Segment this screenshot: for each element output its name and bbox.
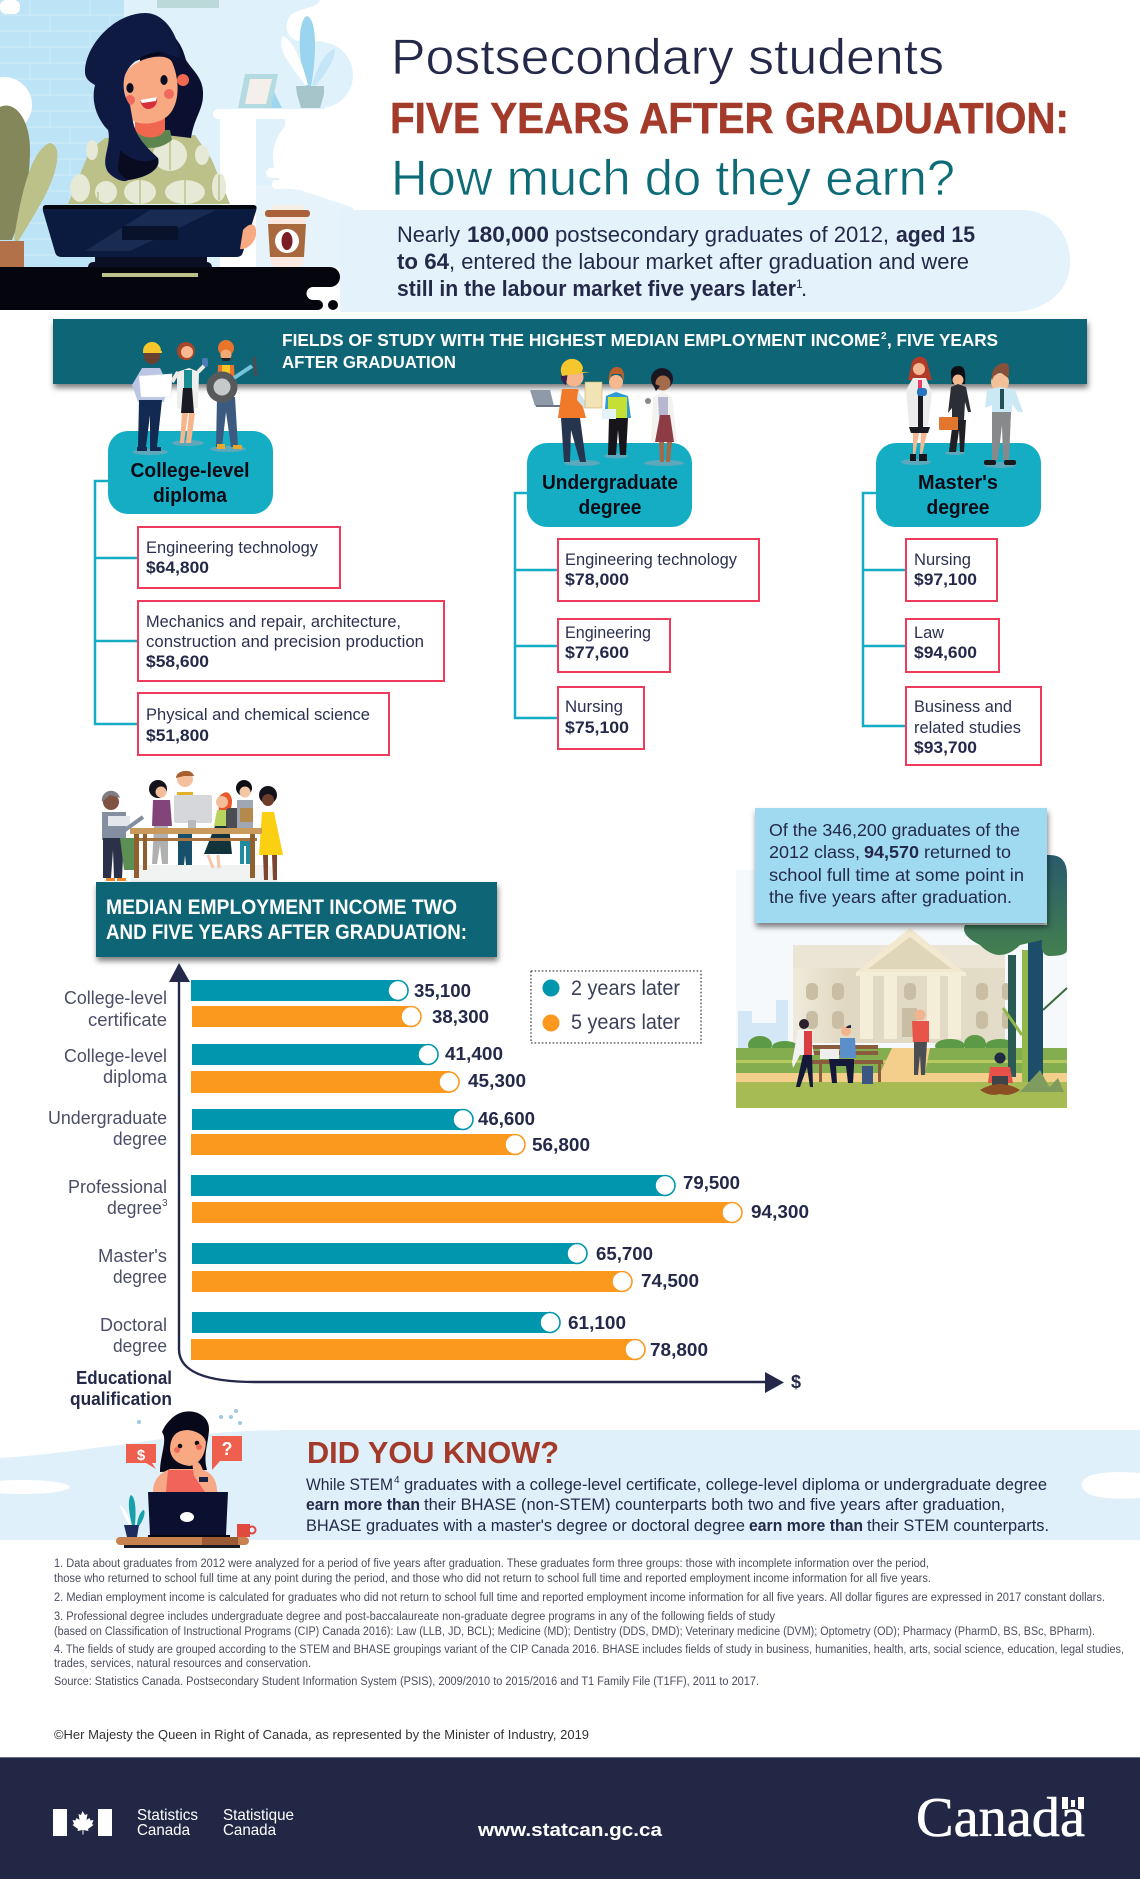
hero illustration: woman at computer [0, 0, 360, 310]
woman sweater [68, 135, 230, 204]
footer [0, 1757, 1140, 1879]
heading: college-level diploma: College-level [130, 460, 250, 482]
field: engineering technology: $64,800 [146, 559, 209, 577]
plant [0, 105, 57, 268]
heading: master's degree: Master's [918, 472, 998, 494]
field: mechanics [138, 601, 444, 681]
field: law: Law [914, 624, 944, 642]
legend: 5 years later [571, 1011, 680, 1034]
field: physical and chemical science: $51,800 [146, 727, 209, 745]
field: mechanics: Mechanics and repair, architecture, [146, 613, 401, 631]
intro paragraph: postsecondary graduates of 2012, [555, 222, 889, 247]
icon: Canadian flag symbol [53, 1809, 112, 1836]
bars: college-level certificate: 35,100 [414, 981, 471, 1001]
canada wordmark: Canada [916, 1787, 1085, 1849]
bars: college-level certificate [191, 980, 489, 1027]
intro paragraph: . [801, 276, 807, 301]
bars: college-level diploma [191, 1044, 526, 1093]
bars: professional degree: 94,300 [751, 1202, 809, 1222]
bars: undergraduate degree: 46,600 [478, 1109, 535, 1129]
icon: undergraduate workers [530, 359, 684, 466]
intro paragraph [397, 222, 975, 301]
field: nursing [906, 539, 997, 601]
bars: doctoral degree: 78,800 [650, 1340, 708, 1360]
heading: median employment income: AND FIVE YEARS AFTER GRADUATION: [106, 920, 467, 944]
icon: college-level workers [132, 340, 256, 455]
field: nursing: $97,100 [914, 571, 977, 589]
category labels: Professional [68, 1177, 167, 1197]
field: business [906, 687, 1041, 765]
y axis title: qualification [70, 1389, 172, 1409]
text: STEM versus BHASE: 4 [394, 1475, 400, 1486]
field: engineering technology [558, 539, 759, 601]
heading: master's degree: degree [926, 497, 990, 519]
statistics canada wordmark: Canada [137, 1822, 190, 1839]
panel: did you know [0, 1409, 1140, 1548]
icon: master's workers [901, 357, 1023, 468]
title [390, 29, 1069, 206]
field: mechanics: construction and precision production [146, 633, 424, 651]
banner: fields of study: FIELDS OF STUDY WITH THE HIGHEST MEDIAN EMPLOYMENT INCOME [282, 330, 880, 350]
intro paragraph: 180,000 [467, 222, 549, 247]
field: nursing: Nursing [914, 551, 971, 569]
banner: fields of study: 2 [881, 331, 887, 342]
callout: returned to school: Of the 346,200 graduates of the [769, 820, 1020, 840]
heading: college-level diploma [108, 431, 273, 514]
banner: fields of study [53, 319, 1087, 384]
field: law [906, 619, 999, 672]
category labels: 3 [162, 1198, 168, 1209]
heading: master's degree [876, 443, 1041, 527]
category labels: degree [113, 1267, 167, 1287]
icon: woman thinking with laptop: $ [137, 1447, 146, 1464]
text: STEM versus BHASE: their STEM counterparts. [867, 1516, 1049, 1535]
y axis title [70, 1368, 172, 1409]
intro paragraph: still in the labour market five years later [397, 276, 796, 301]
field: engineering technology: Engineering technology [565, 551, 738, 569]
heading: undergraduate degree: Undergraduate [542, 472, 678, 494]
icon: team around table [102, 771, 283, 884]
field: business: related studies [914, 719, 1021, 737]
intro paragraph blob [340, 210, 1070, 312]
field: physical and chemical science [138, 693, 389, 755]
title: How much do they earn? [391, 150, 955, 206]
field: engineering technology [138, 527, 340, 588]
field: engineering: $77,600 [565, 644, 629, 662]
panel: master's degree [863, 443, 1041, 765]
text: STEM versus BHASE: their BHASE (non-STEM) counterparts both two and five years after graduation, [424, 1495, 1005, 1514]
bars: master's degree: 65,700 [596, 1244, 653, 1264]
illustration: campus [736, 855, 1067, 1108]
text: STEM versus BHASE: While STEM [306, 1475, 393, 1494]
footnotes: 2. Median employment income is calculated for graduates who did not return to school full time and reported employment income information for all five years. All dollar figures are expressed in 2017 constant dollars. [54, 1592, 1105, 1604]
website: www.statcan.gc.ca [477, 1820, 663, 1840]
bench [810, 1045, 883, 1082]
callout: returned to school: the five years after graduation. [769, 887, 1012, 907]
y axis title: Educational [76, 1368, 172, 1388]
intro paragraph: , entered the labour market after graduation and were [449, 249, 969, 274]
field: business: $93,700 [914, 739, 977, 757]
field: engineering [558, 619, 670, 672]
callout: returned to school: school full time at some point in [769, 865, 1024, 885]
banner: fields of study: AFTER GRADUATION [282, 352, 456, 372]
text: STEM versus BHASE: earn more than [306, 1495, 420, 1514]
field: nursing: Nursing [565, 698, 623, 716]
desk [0, 267, 340, 310]
category labels [48, 988, 168, 1356]
field: mechanics: $58,600 [146, 653, 209, 671]
footnotes: Source: Statistics Canada. Postsecondary Student Information System (PSIS), 2009/2010 to 2015/2016 and T1 Family File (T1FF), 2011 to 2017. [54, 1676, 759, 1688]
heading: did you know: DID YOU KNOW? [307, 1435, 559, 1470]
heading: median employment income [96, 882, 497, 957]
axes: $ [791, 1372, 801, 1392]
field: law: $94,600 [914, 644, 977, 662]
face [124, 57, 178, 124]
footnotes: 3. Professional degree includes undergraduate degree and post-baccalaureate non-graduate degree programs in any of the following fields of study [54, 1611, 775, 1623]
field: nursing [558, 687, 644, 749]
legend [531, 971, 701, 1043]
callout: returned to school: 94,570 [864, 842, 919, 862]
heading: college-level diploma: diploma [153, 485, 228, 507]
panel: college-level diploma [95, 431, 444, 755]
footnotes: trades, services, natural resources and conservation. [54, 1658, 311, 1670]
footnotes [54, 1558, 1124, 1688]
category labels: certificate [88, 1010, 167, 1030]
field: engineering: Engineering [565, 624, 651, 642]
heading: undergraduate degree: degree [578, 497, 642, 519]
bars: doctoral degree [191, 1312, 708, 1360]
students [862, 1066, 873, 1084]
bars: college-level diploma: 45,300 [468, 1071, 526, 1091]
category labels: degree [113, 1129, 167, 1149]
footnotes: (based on Classification of Instructional Programs (CIP) Canada 2016): Law (LLB, JD, BCL); Medicine (MD); Dentistry (DDS, DMD); Veterinary medicine (DVM); Optometry (OD); Pharmacy (PharmD, BS, BSc, BPharm). [54, 1626, 1095, 1638]
text: STEM versus BHASE: BHASE graduates with a master's degree or doctoral degree [306, 1516, 745, 1535]
category labels: Master's [98, 1246, 167, 1266]
axes [169, 963, 801, 1393]
statistics canada wordmark: Canada [223, 1822, 276, 1839]
hair front [85, 13, 180, 181]
text: STEM versus BHASE [306, 1475, 1049, 1535]
text: STEM versus BHASE: graduates with a college-level certificate, college-level diploma or undergraduate degree [404, 1475, 1047, 1494]
footnotes: those who returned to school full time at any point during the period, and those who did not return to school full time and reported employment income information for all five years. [54, 1573, 931, 1585]
copyright: ©Her Majesty the Queen in Right of Canada, as represented by the Minister of Industry, 2019 [54, 1727, 589, 1742]
hair back [140, 25, 203, 138]
bars: professional degree: 79,500 [683, 1173, 740, 1193]
category labels: degree [113, 1336, 167, 1356]
field: physical and chemical science: Physical and chemical science [146, 706, 370, 724]
intro paragraph: 1 [796, 277, 803, 291]
field: engineering technology: $78,000 [565, 571, 629, 589]
callout: returned to school: returned to [924, 842, 1011, 862]
statistics canada wordmark: Statistics [137, 1807, 198, 1824]
banner: fields of study: , FIVE YEARS [887, 330, 998, 350]
intro paragraph: to 64 [397, 249, 450, 274]
field: engineering technology: Engineering technology [146, 539, 319, 557]
intro paragraph: aged 15 [896, 222, 975, 247]
category labels: Doctoral [100, 1315, 167, 1335]
title: FIVE YEARS AFTER GRADUATION: [390, 94, 1069, 143]
heading: median employment income: MEDIAN EMPLOYMENT INCOME TWO [106, 895, 457, 919]
bars: undergraduate degree [191, 1109, 590, 1155]
computer [43, 205, 257, 257]
icon: woman thinking with laptop: ? [222, 1439, 232, 1459]
legend: 2 years later [571, 977, 680, 1000]
coffee cup [265, 205, 310, 267]
category labels: College-level [64, 988, 167, 1008]
text: STEM versus BHASE: earn more than [749, 1516, 863, 1535]
bar chart: median employment income [48, 963, 809, 1409]
category labels: College-level [64, 1046, 167, 1066]
bars: college-level certificate: 38,300 [432, 1007, 489, 1027]
statistics canada wordmark: Statistique [223, 1807, 294, 1824]
bars: master's degree: 74,500 [641, 1271, 699, 1291]
category labels: diploma [103, 1067, 168, 1087]
heading: undergraduate degree [527, 443, 692, 527]
bars: college-level diploma: 41,400 [445, 1044, 503, 1064]
bars: master's degree [192, 1243, 699, 1292]
bars: doctoral degree: 61,100 [568, 1313, 626, 1333]
callout: returned to school [755, 808, 1047, 923]
tree [964, 855, 1067, 1092]
panel: undergraduate degree [515, 443, 759, 749]
category labels: Undergraduate [48, 1108, 167, 1128]
statistics canada wordmark [137, 1807, 294, 1839]
field: nursing: $75,100 [565, 719, 629, 737]
category labels: degree [107, 1198, 162, 1218]
icon: woman thinking with laptop [116, 1409, 256, 1548]
field: business: Business and [914, 698, 1012, 716]
footnotes: 1. Data about graduates from 2012 were analyzed for a period of five years after graduation. These graduates form three groups: those with incomplete information over the period, [54, 1558, 929, 1570]
title: Postsecondary students [391, 29, 944, 85]
bars: professional degree [191, 1173, 809, 1223]
callout: returned to school: 2012 class, [769, 842, 860, 862]
bars: undergraduate degree: 56,800 [532, 1135, 590, 1155]
intro paragraph: Nearly [397, 222, 460, 247]
